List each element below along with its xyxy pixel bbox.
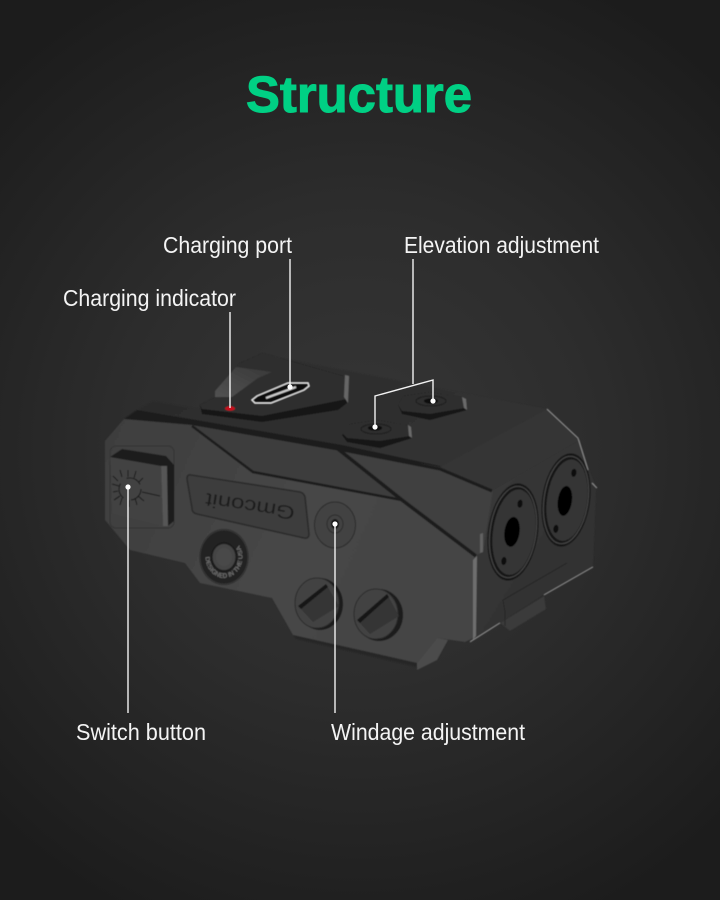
logo text: Gmconit xyxy=(203,488,296,523)
label: elevation adjustment: Elevation adjustment xyxy=(404,232,599,258)
front mounting tab xyxy=(470,563,593,642)
elevation knob rear xyxy=(398,392,467,420)
front face xyxy=(470,440,596,642)
chamfer band xyxy=(440,409,580,490)
mounting claw xyxy=(417,638,448,670)
label: switch button xyxy=(76,484,206,745)
elevation knob front xyxy=(342,420,412,448)
panel grooves xyxy=(190,423,492,556)
windage adjustment dial xyxy=(314,502,356,548)
plate facet xyxy=(215,367,272,397)
switch button xyxy=(110,446,174,528)
label: charging port xyxy=(163,232,293,390)
tab outline on front face xyxy=(503,563,567,626)
charging plate xyxy=(200,353,349,422)
label: switch button: Switch button xyxy=(76,719,206,745)
corner highlight strips xyxy=(473,533,483,640)
right lens xyxy=(536,450,596,550)
edge highlights xyxy=(470,409,597,642)
badge: DESIGNED IN THE USA xyxy=(205,545,244,579)
nameplate xyxy=(187,475,309,538)
dark top rail xyxy=(124,410,493,494)
left lens xyxy=(481,480,545,584)
label: elevation adjustment xyxy=(372,232,599,430)
windage screw left xyxy=(295,578,343,630)
laser icon xyxy=(112,470,160,507)
label: windage adjustment: Windage adjustment xyxy=(331,719,525,745)
upper side panel A xyxy=(192,425,402,500)
label: charging indicator: Charging indicator xyxy=(63,285,236,311)
title: Structure xyxy=(246,66,472,123)
USB-C charging port xyxy=(252,383,309,403)
top face xyxy=(124,354,547,467)
side face xyxy=(105,419,477,663)
side bottom edge xyxy=(293,635,417,667)
label: windage adjustment xyxy=(331,521,525,745)
windage screw right xyxy=(354,589,403,641)
charging indicator LED xyxy=(225,406,235,411)
badge xyxy=(199,529,249,585)
device: laser sight xyxy=(105,364,598,670)
plate notch highlight xyxy=(344,375,349,403)
label: charging port: Charging port xyxy=(163,232,292,258)
upper side panel B xyxy=(340,449,493,555)
